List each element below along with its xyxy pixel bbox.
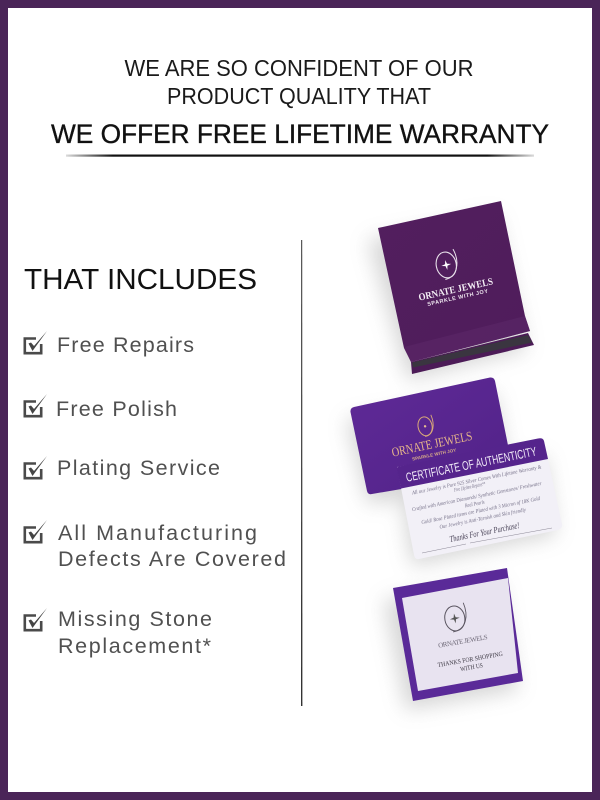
product: purple card [350, 377, 513, 494]
title underline [66, 154, 534, 157]
certificate body text: Gold/ Rose Plated items are Plated with 3 Micron of 18K Gold [421, 495, 541, 526]
thank-you logo [428, 598, 505, 677]
box logo [410, 242, 496, 309]
certificate body text: Crafted with American Diamonds/ Synthetic Gemstones/ Freshwater [411, 480, 543, 513]
list: warranty items [25, 331, 286, 658]
title: WE OFFER FREE LIFETIME WARRANTY [51, 119, 549, 149]
card logo: ORNATE JEWELS [390, 428, 474, 460]
certificate body text: Our Jewelry is Anti-Tarnish and Skin friendly [439, 506, 527, 531]
heading: that includes: THAT INCLUDES [24, 264, 257, 296]
product: certificate card [397, 438, 562, 559]
item: manufacturing defects [25, 520, 286, 571]
item: missing stone replacement [25, 607, 212, 658]
item: manufacturing defects: All Manufacturing [58, 521, 257, 545]
item: free polish: Free Polish [56, 397, 177, 421]
certificate body text [410, 463, 543, 544]
item: missing stone replacement: Replacement* [58, 634, 212, 658]
certificate body text: All our Jewelry is Pure 925 Silver Comes With Lifetime Warranty & [410, 463, 543, 497]
certificate body text: Real Pearls [464, 500, 485, 510]
title: PRODUCT QUALITY THAT [167, 83, 431, 109]
item: plating service: Plating Service [57, 456, 220, 480]
title: WE ARE SO CONFIDENT OF OUR [124, 55, 474, 81]
thank-you logo: THANKS FOR SHOPPING [437, 651, 504, 669]
card logo: SPARKLE WITH JOY [412, 447, 457, 462]
item: free repairs: Free Repairs [57, 333, 194, 357]
thank-you logo: WITH US [460, 662, 484, 673]
certificate body text: Thanks For Your Purchase! [449, 520, 520, 544]
thank-you logo: ORNATE JEWELS [438, 633, 488, 650]
title [51, 55, 549, 149]
box logo: ORNATE JEWELS [418, 276, 495, 304]
card logo [386, 407, 475, 466]
certificate body text: Free Lifetime Repairs** [453, 480, 486, 494]
soft product shadows [346, 215, 556, 710]
item: manufacturing defects: Defects Are Covered [58, 547, 286, 571]
box logo: SPARKLE WITH JOY [427, 289, 489, 308]
product: thank-you card [393, 568, 523, 701]
product: jewellery box [378, 201, 534, 374]
vertical divider [301, 240, 302, 706]
item: missing stone replacement: Missing Stone [58, 607, 212, 631]
certificate heading: CERTIFICATE OF AUTHENTICITY [405, 444, 538, 485]
